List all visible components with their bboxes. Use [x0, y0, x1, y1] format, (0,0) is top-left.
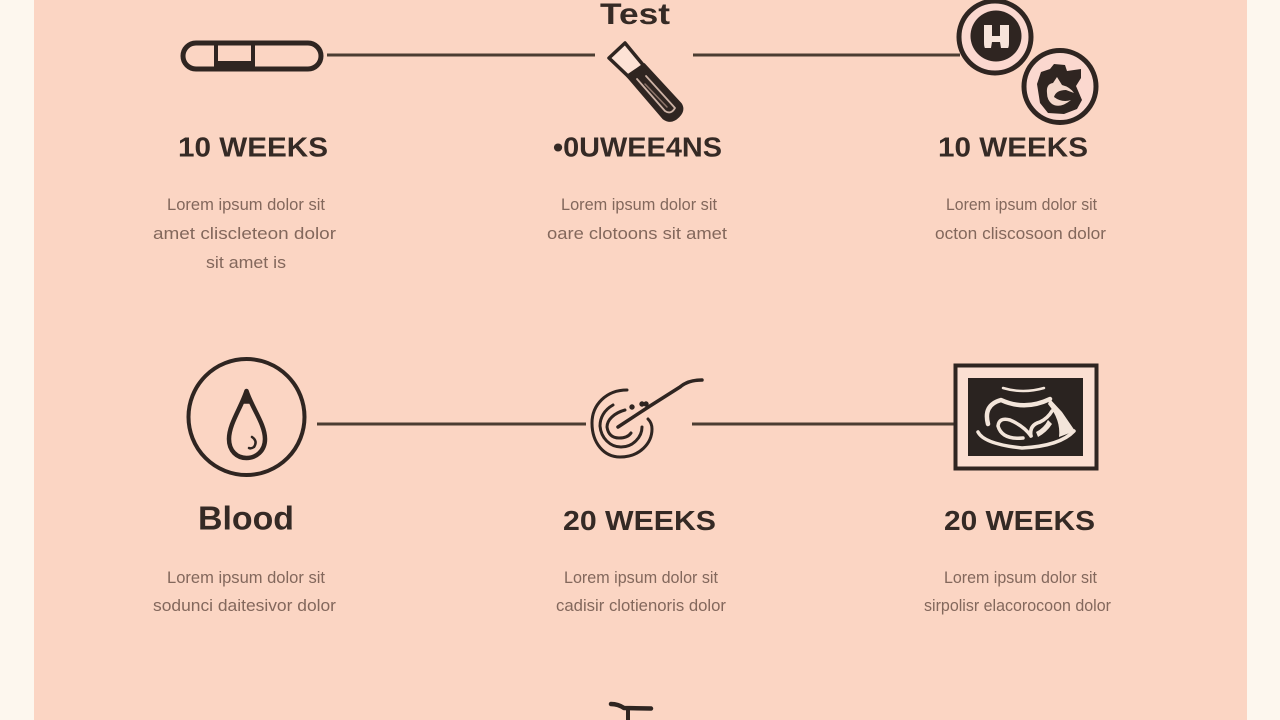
icon: cropped bottom mark [611, 704, 651, 720]
icon: circle with H mark [959, 1, 1031, 73]
heading: column 3 row 2: 20 WEEKS [944, 505, 1095, 536]
text block: column 1 row 2: sodunci daitesivor dolor [153, 597, 337, 615]
text block: column 3 row 1: Lorem ipsum dolor sit [946, 196, 1097, 214]
connector: drop to probe [317, 422, 586, 426]
icon: test strip [183, 43, 321, 69]
text block: column 1 row 1: Lorem ipsum dolor sit [167, 196, 325, 214]
text block: column 2 row 2: cadisir clotienoris dolor [556, 597, 727, 615]
heading: column 3 row 1: 10 WEEKS [938, 132, 1088, 162]
text block: column 3 row 2: sirpolisr elacorocoon dolor [924, 597, 1111, 615]
text block: column 3 row 1: octon cliscosoon dolor [935, 225, 1107, 243]
text block: column 3 row 1 [935, 196, 1107, 243]
text block: column 1 row 2: Lorem ipsum dolor sit [167, 569, 325, 587]
text block: column 1 row 1: amet cliscleteon dolor [153, 225, 337, 243]
connector: probe to scan [692, 422, 954, 426]
text block: column 1 row 2 [153, 569, 337, 615]
connector: tube to circles [693, 54, 960, 56]
text block: column 1 row 1: sit amet is [206, 254, 286, 272]
icon: blood drop in circle [188, 359, 304, 475]
connector: strip to tube [327, 54, 595, 56]
text block: column 2 row 1 [547, 196, 727, 243]
icon: test tube [609, 43, 682, 120]
icon: ultrasound scan frame [956, 366, 1096, 468]
text block: column 2 row 2 [556, 569, 727, 615]
text block: column 3 row 2: Lorem ipsum dolor sit [944, 569, 1097, 587]
text block: column 2 row 1: oare clotoons sit amet [547, 225, 727, 243]
text block: column 2 row 2: Lorem ipsum dolor sit [564, 569, 718, 587]
icon: ultrasound probe [592, 380, 702, 457]
icon: paired circles [959, 1, 1096, 122]
text block: column 3 row 2 [924, 569, 1111, 615]
icon: circle with face mark [1024, 50, 1096, 122]
heading: Blood: Blood [198, 500, 294, 536]
heading: column 1 row 1: 10 WEEKS [178, 132, 328, 162]
text block: column 1 row 1 [153, 196, 337, 272]
heading: column 2 row 2: 20 WEEKS [563, 505, 716, 536]
heading: column 2 row 1: •0UWEE4NS [553, 132, 722, 162]
text block: column 2 row 1: Lorem ipsum dolor sit [561, 196, 717, 214]
